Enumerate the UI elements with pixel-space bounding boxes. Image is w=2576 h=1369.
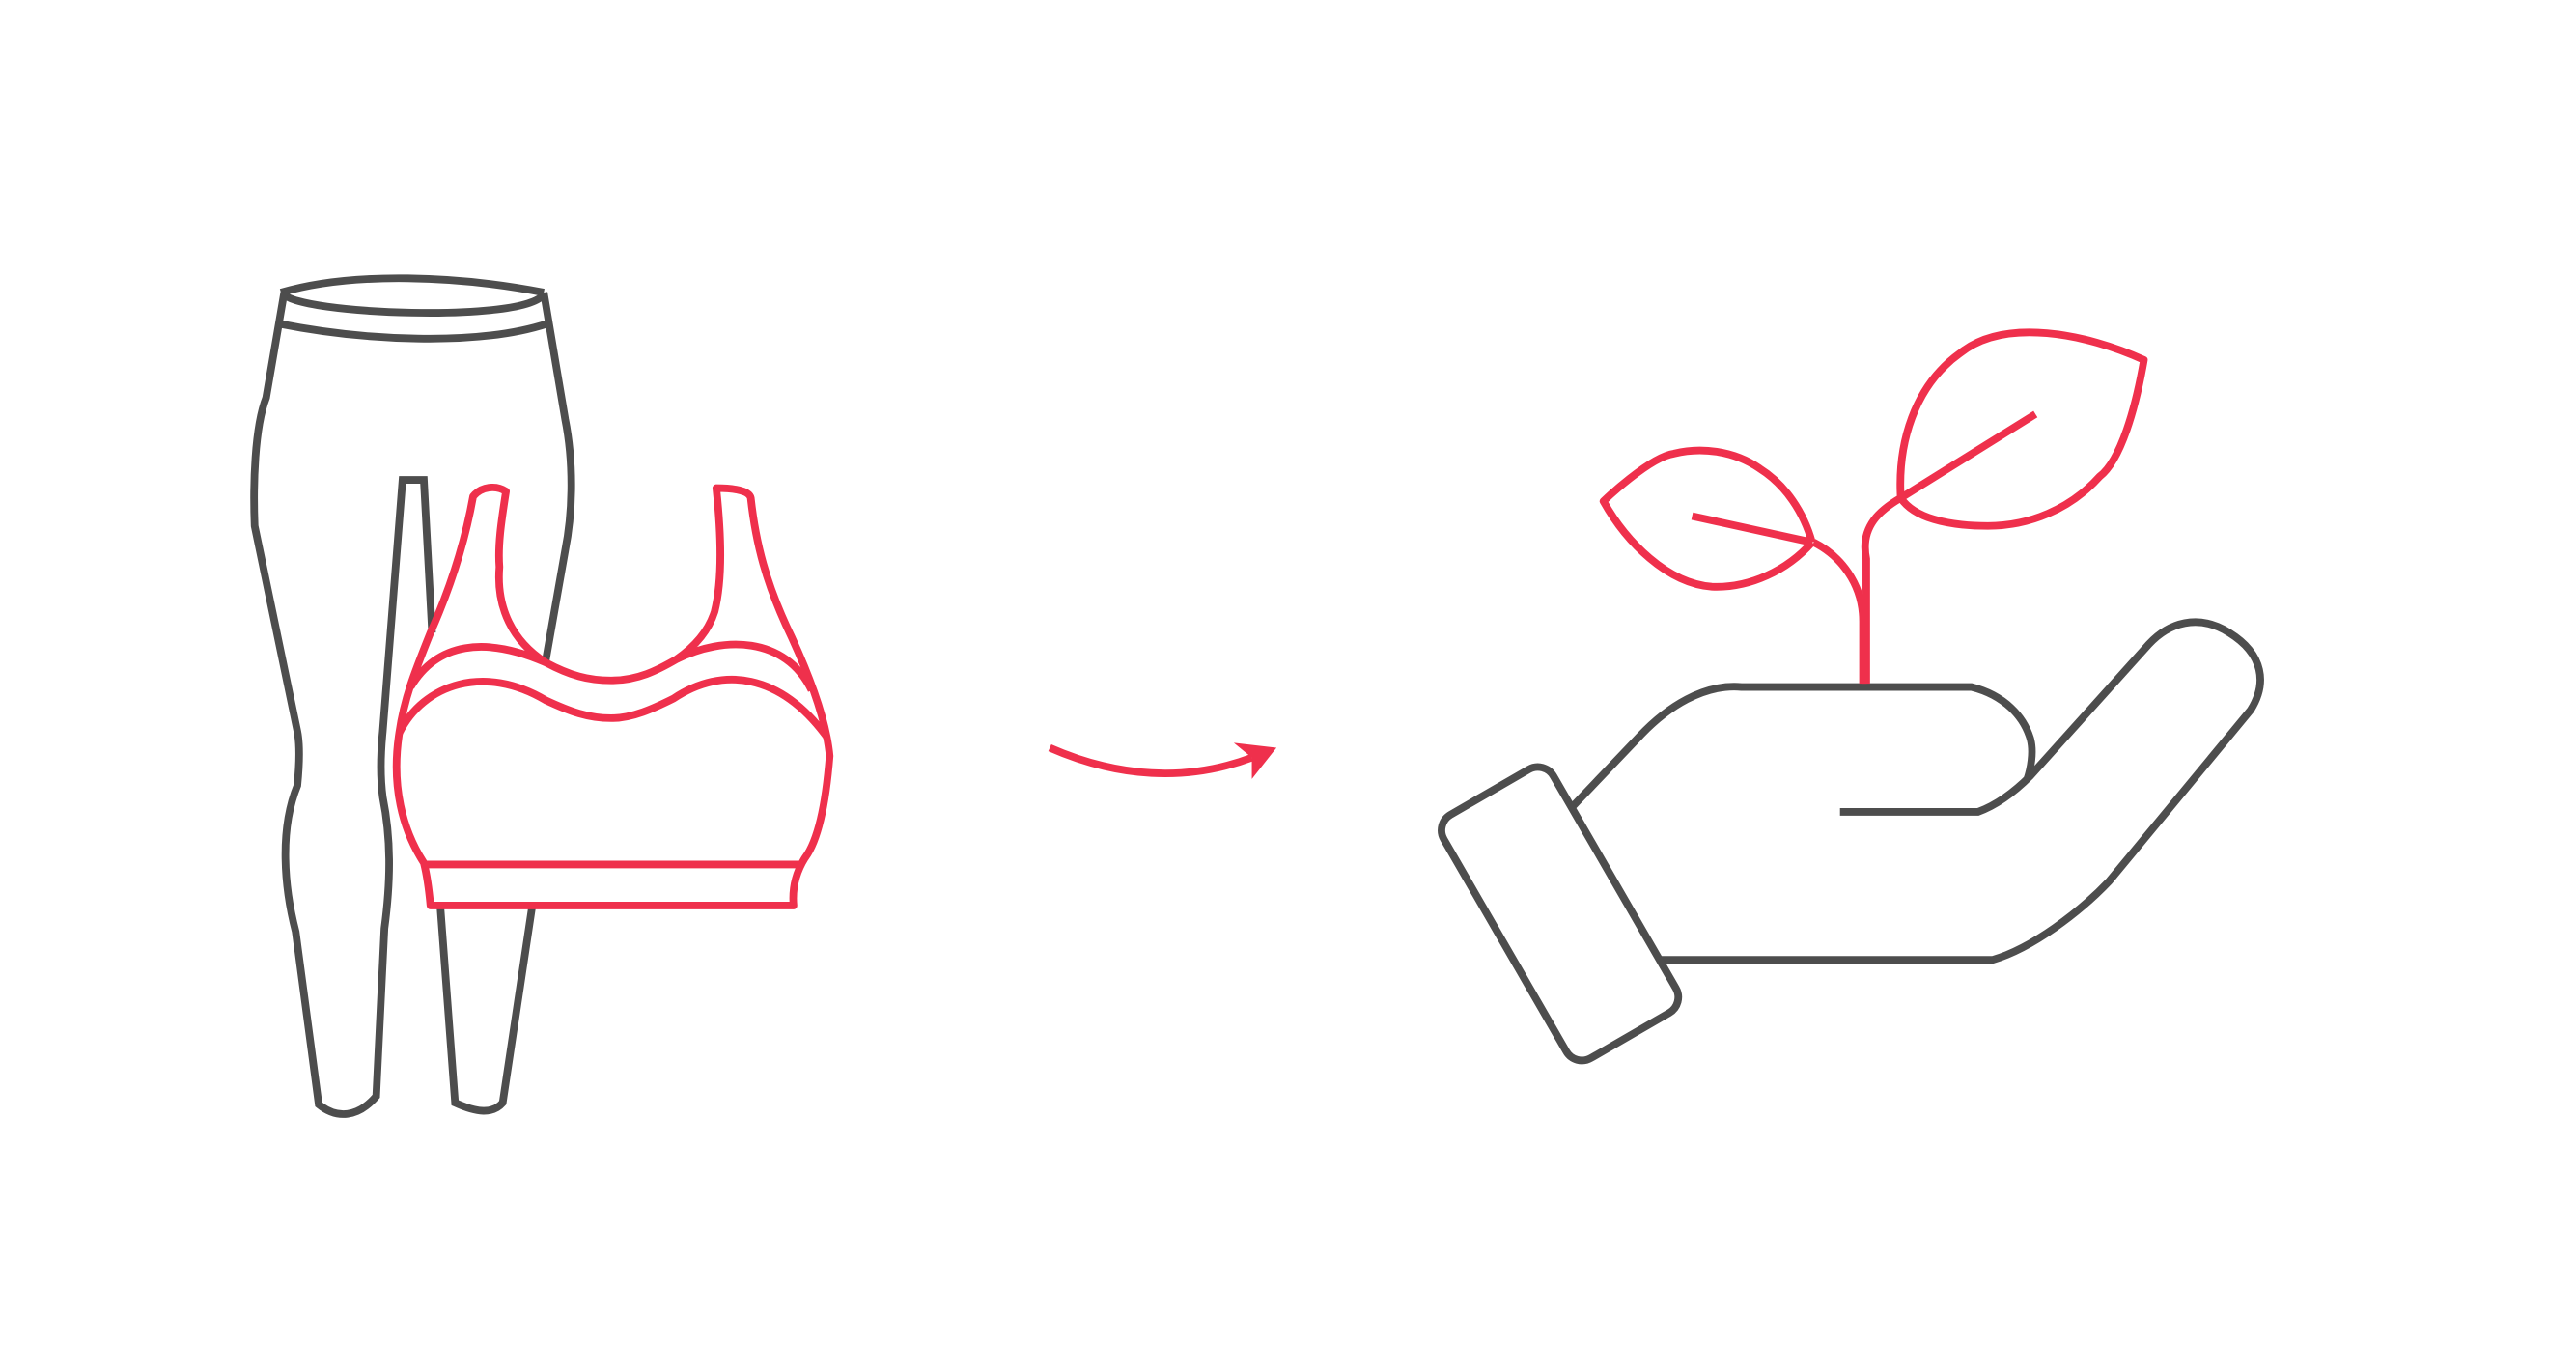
cuff	[1435, 761, 1685, 1067]
hand	[1572, 622, 2260, 960]
icon: hand holding plant	[1435, 332, 2260, 1067]
arrow	[1050, 742, 1276, 779]
icon: leggings	[254, 278, 572, 1114]
icon: sports bra	[397, 488, 829, 906]
plant	[1604, 332, 2143, 684]
